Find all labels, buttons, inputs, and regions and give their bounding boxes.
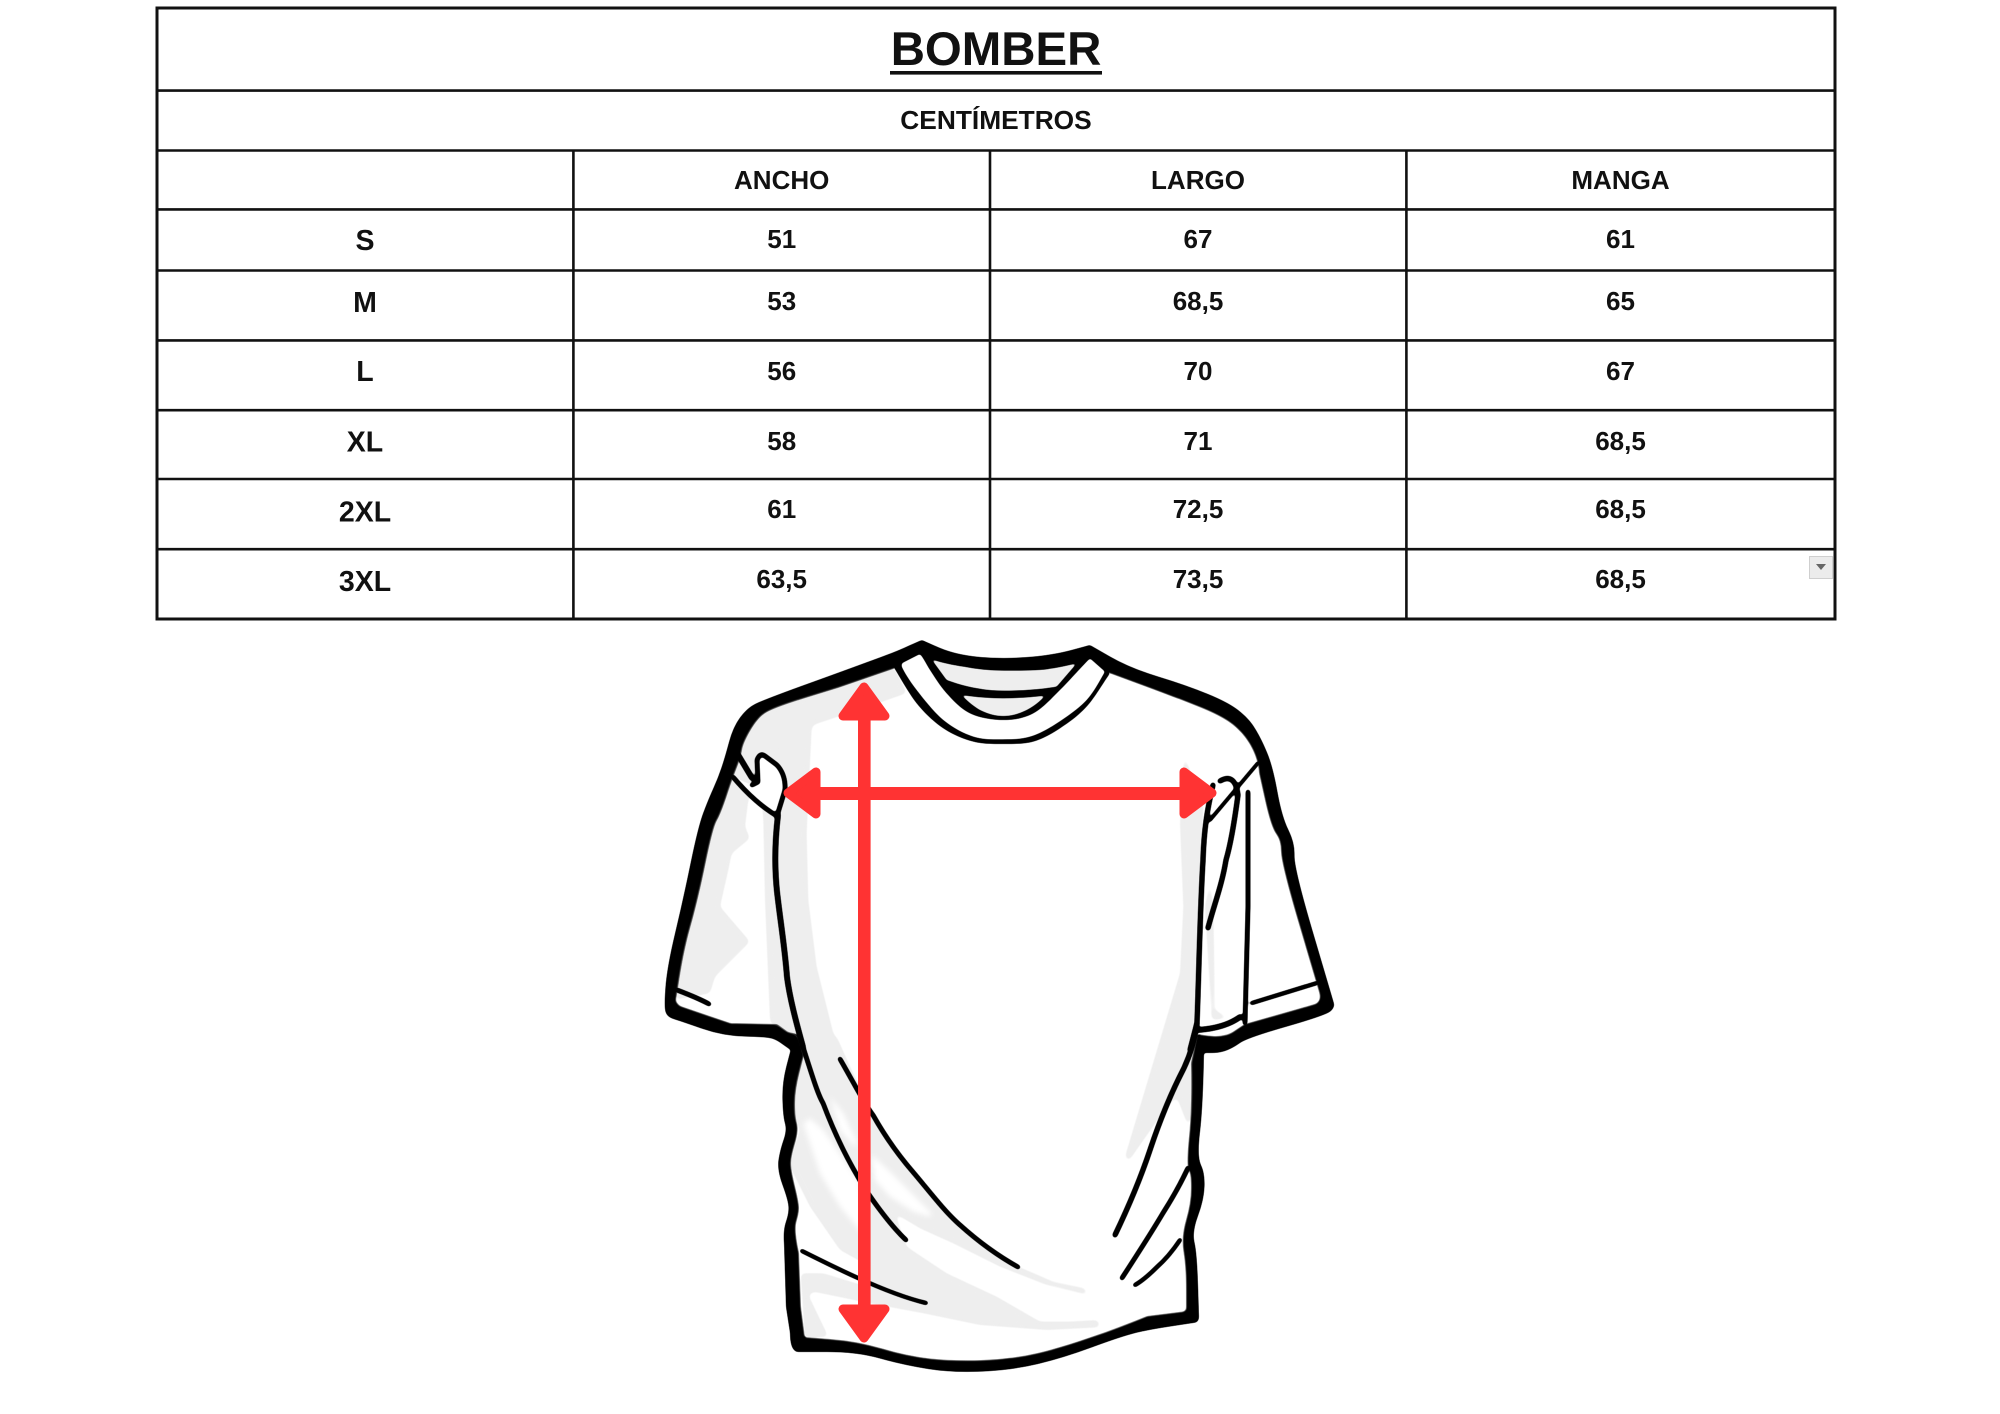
row M: 65 <box>1606 286 1635 316</box>
left armhole and seam <box>733 753 906 1240</box>
title: BOMBER <box>891 23 1101 76</box>
column headers: ANCHO <box>734 165 829 195</box>
shirt outline <box>665 640 1334 1372</box>
row S: S <box>355 225 375 257</box>
arrow: horizontal width <box>788 772 1212 814</box>
grey shading <box>650 667 1228 1338</box>
unit heading: CENTÍMETROS <box>900 105 1092 135</box>
arrow: vertical length <box>843 687 885 1338</box>
front folds <box>802 1023 1197 1303</box>
row 2XL <box>339 494 1646 529</box>
row XL: 71 <box>1184 426 1212 456</box>
right sleeve seams <box>1190 763 1317 1050</box>
row 2XL: 2XL <box>339 497 391 529</box>
row 2XL: 72,5 <box>1173 494 1223 524</box>
row M: M <box>353 287 377 319</box>
icon: dropdown button <box>1810 556 1832 578</box>
inner outline thickening <box>675 665 1321 1361</box>
collar black base <box>893 640 1110 744</box>
row L: L <box>356 356 374 388</box>
row L <box>356 356 1635 388</box>
row L: 56 <box>767 356 796 386</box>
column headers <box>734 165 1670 195</box>
size table <box>157 8 1835 619</box>
row S: 61 <box>1606 224 1635 254</box>
row M: 68,5 <box>1173 286 1223 316</box>
column headers: LARGO <box>1151 165 1245 195</box>
row 3XL: 68,5 <box>1595 564 1646 594</box>
column headers: MANGA <box>1571 165 1670 195</box>
t-shirt illustration <box>650 640 1334 1372</box>
row M: 53 <box>767 286 796 316</box>
row 3XL: 73,5 <box>1173 564 1223 594</box>
row XL <box>347 426 1646 458</box>
row 2XL: 61 <box>767 494 796 524</box>
row 3XL <box>339 564 1646 598</box>
row 3XL: 63,5 <box>756 564 807 594</box>
row 2XL: 68,5 <box>1595 494 1646 524</box>
shirt body fill <box>675 665 1321 1361</box>
neck interior shading <box>932 659 1077 716</box>
table grid <box>157 8 1835 619</box>
row L: 70 <box>1184 356 1212 386</box>
row S: 67 <box>1184 224 1212 254</box>
left armhole fill <box>733 755 785 816</box>
row L: 67 <box>1606 356 1635 386</box>
row 3XL: 3XL <box>339 566 391 598</box>
row S: 51 <box>767 224 796 254</box>
row M <box>353 286 1635 319</box>
left cuff line <box>677 990 709 1004</box>
row XL: 68,5 <box>1595 426 1646 456</box>
row S <box>355 224 1635 257</box>
row XL: 58 <box>767 426 796 456</box>
row XL: XL <box>347 426 383 458</box>
collar white band <box>902 654 1105 739</box>
